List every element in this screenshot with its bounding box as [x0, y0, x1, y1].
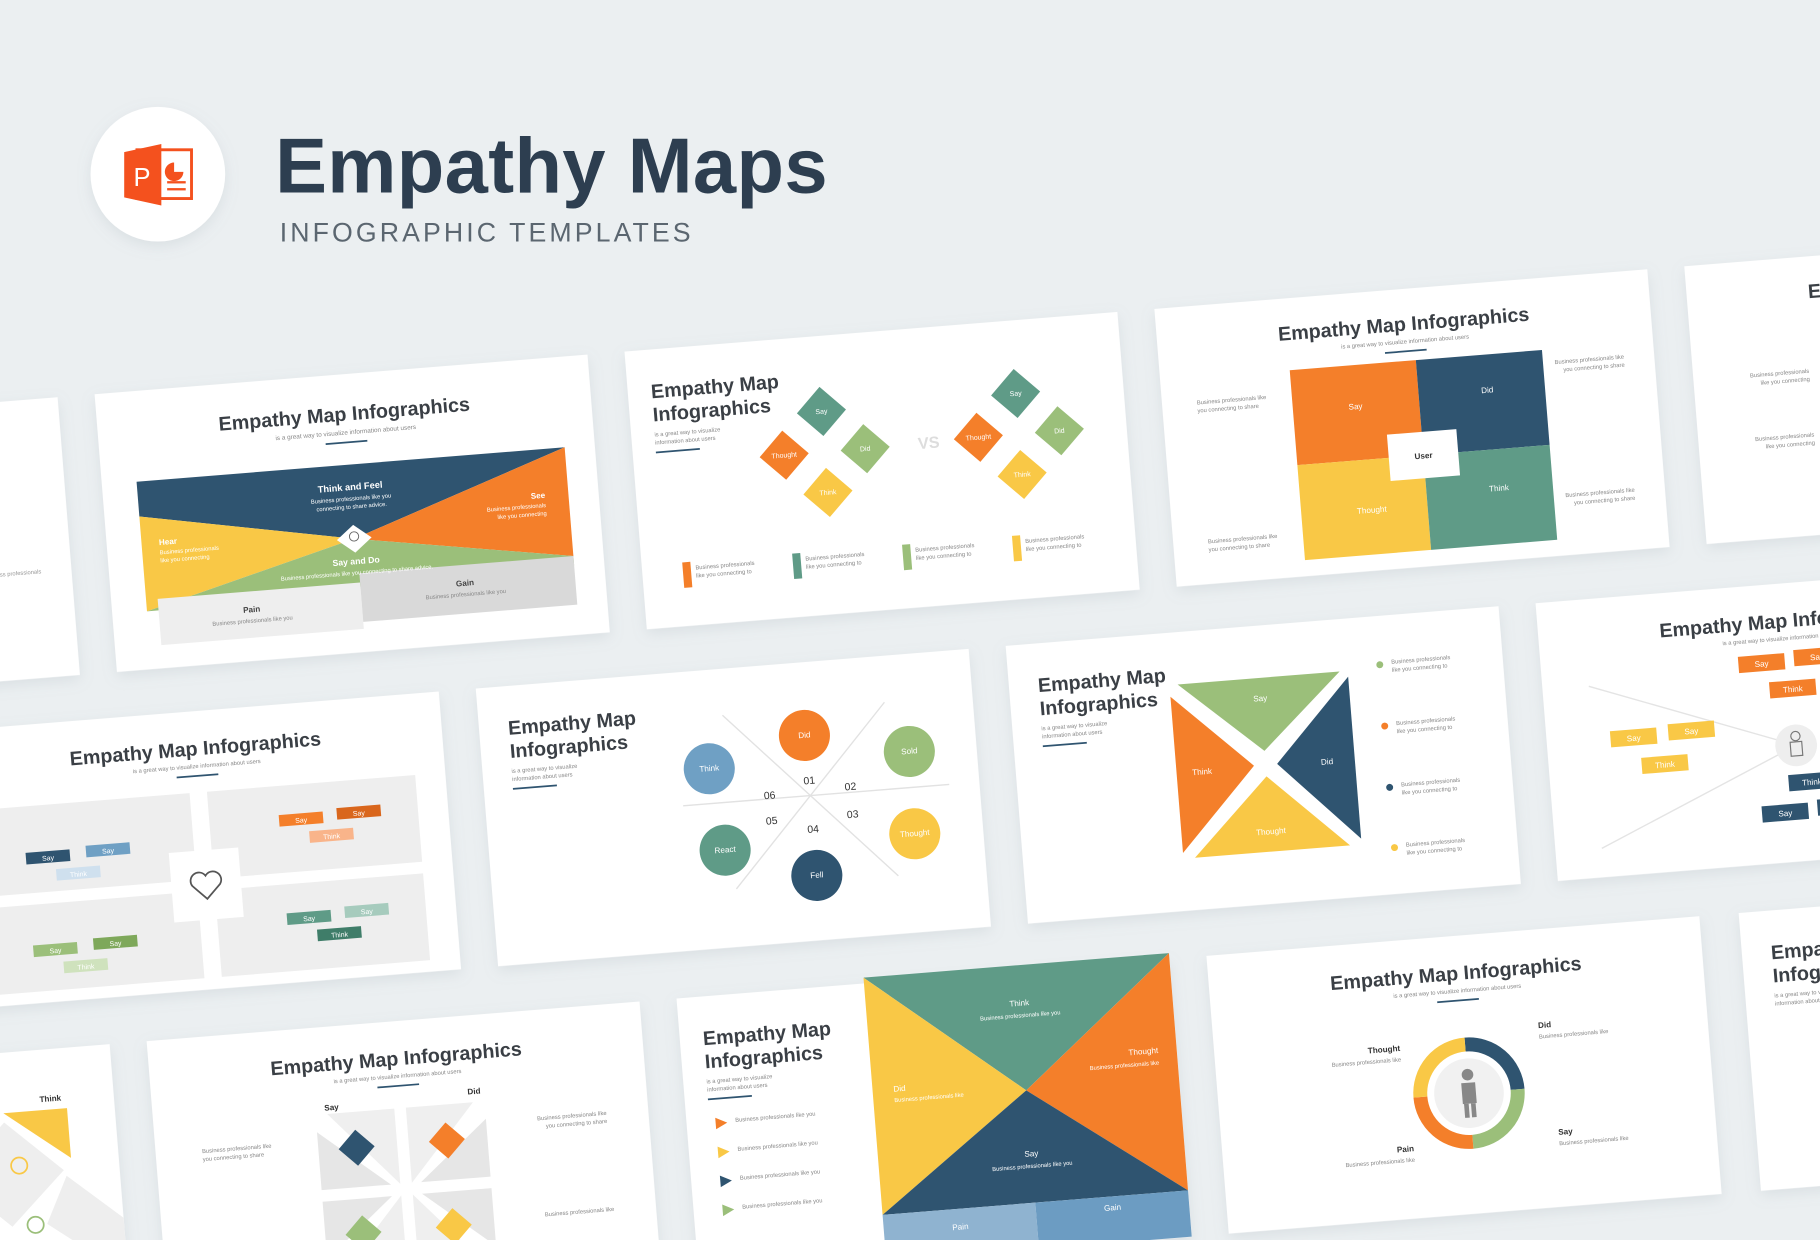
card: X triangles: Think: [1192, 767, 1213, 777]
card: circles: Empathy Map: [507, 708, 637, 740]
card: quadrant user: Business professionals like: [1554, 355, 1624, 366]
card: circles: Sold: [901, 746, 918, 756]
card: diamonds x: you connecting to share: [203, 1152, 264, 1163]
card: big square: Say: [1024, 1149, 1040, 1159]
card: hear/see/think diagram: Gain: [456, 578, 474, 588]
card: diamonds x: Empathy Map Infographics: [270, 1038, 523, 1080]
card: diamonds vs: Empathy Map: [650, 371, 780, 403]
logo: powerpoint: [91, 107, 225, 241]
card: diamonds vs: Thought: [965, 434, 992, 443]
card: ring person: Did: [1538, 1020, 1552, 1030]
card: tags person: Say: [1754, 659, 1770, 669]
card: tags heart: Say: [49, 947, 62, 955]
card: ring person: Empathy Map Infographics: [1329, 953, 1582, 995]
card: tags person: [1536, 564, 1820, 881]
card: big square: Did: [893, 1084, 906, 1094]
card: diamonds vs: like you connecting to: [916, 551, 972, 562]
card: hear/see/think diagram: Business professionals: [487, 503, 546, 514]
card: row1 partial right: like you connecting: [1760, 377, 1810, 387]
card: X triangles: Business professionals: [1396, 716, 1456, 727]
card: quadrant user: you connecting to share: [1209, 543, 1270, 554]
card: circles: Think: [699, 763, 720, 774]
card: tags person: Say: [1684, 726, 1700, 737]
card: big square: Business professionals like you: [740, 1169, 820, 1182]
card: hear/see/think diagram: Business professionals like you: [212, 615, 293, 628]
card: big square: Pain: [952, 1222, 969, 1232]
card: tags heart: is a great way to visualize information about users: [133, 759, 261, 775]
card: tags heart: Think: [331, 931, 349, 940]
card: quadrant user: you connecting to share: [1574, 496, 1636, 507]
card: row3 partial right: [1739, 873, 1820, 1191]
card: tags heart: Think: [323, 833, 341, 841]
card: diamonds vs: Business professionals: [915, 543, 975, 554]
card: X triangles: Did: [1321, 757, 1333, 767]
card: tags heart: Say: [42, 855, 55, 863]
card: X triangles: Business professionals: [1406, 838, 1465, 849]
card: big square: Empathy Map: [702, 1018, 832, 1050]
card: X triangles: Thought: [1256, 826, 1287, 837]
card: diamonds vs: Did: [1054, 428, 1065, 435]
card: quadrant user: you connecting to share: [1197, 404, 1259, 415]
card: quadrant user: Did: [1481, 385, 1494, 395]
logo: powerpoint: P: [133, 164, 151, 192]
card: hear/see/think diagram: Think and Feel: [317, 480, 383, 495]
card: circles: 01: [803, 776, 816, 787]
card: tags heart: Think: [70, 871, 88, 879]
card: diamonds vs: Say: [1009, 390, 1022, 398]
card: diamonds x: is a great way to visualize information about users: [333, 1069, 462, 1085]
card: hear/see/think diagram: Pain: [243, 605, 261, 615]
card: diamonds x: Did: [467, 1087, 481, 1097]
card: tags heart: Empathy Map Infographics: [69, 728, 322, 770]
card: tags heart: [0, 692, 461, 1009]
card: diamonds vs: VS: [917, 433, 940, 453]
card: X triangles: Business professionals: [1391, 655, 1451, 666]
card: ring person: Business professionals like: [1559, 1136, 1629, 1147]
card: quadrant user: Thought: [1357, 505, 1388, 516]
card: quadrant user: Say: [1348, 402, 1364, 412]
card: diamonds x: [147, 1002, 662, 1240]
card: big square: Business professionals like you: [992, 1161, 1073, 1173]
card: hear/see/think diagram: [95, 355, 610, 672]
card: diamonds vs: information about users: [655, 436, 716, 447]
card: tags heart: Say: [303, 915, 316, 923]
card: diamonds vs: Infographics: [652, 395, 772, 426]
card: tags heart: Say: [109, 940, 122, 948]
card: diamonds vs: Thought: [771, 452, 797, 461]
card: diamonds vs: like you connecting to: [696, 569, 752, 580]
card: big square: Business professionals like you: [737, 1140, 818, 1153]
card: hear/see/think diagram: Business professionals like you connecting to share advice.: [281, 564, 434, 583]
card: big square: is a great way to visualize: [706, 1074, 773, 1085]
card: hear/see/think diagram: Business professionals like you: [311, 493, 391, 506]
card: quadrant user: Business professionals like: [1565, 488, 1635, 499]
card: quadrant user: Business professionals like: [1208, 534, 1278, 545]
card: X triangles: Empathy Map: [1037, 665, 1167, 697]
card: hear/see/think diagram: Empathy Map Infographics: [218, 394, 471, 436]
card: diamonds vs: Say: [815, 408, 828, 416]
card: X triangles: like you connecting to: [1406, 846, 1462, 857]
card: hear/see/think diagram: See: [530, 491, 546, 501]
card: hear/see/think diagram: Business professionals: [160, 546, 219, 556]
card: row1 partial right: like you connecting: [1766, 440, 1815, 450]
card: tags heart: Say: [295, 817, 308, 825]
card: quadrant user: [1154, 269, 1670, 587]
card: quadrant user: Empathy Map Infographics: [1277, 304, 1530, 346]
card: circles: 06: [763, 790, 776, 802]
card: diamonds vs: like you connecting to: [1026, 543, 1082, 553]
card: row1 partial left: [0, 397, 80, 715]
card: X triangles: Business professionals: [1401, 778, 1461, 788]
card: hear/see/think diagram: like you connecting: [497, 511, 547, 521]
card: diamonds vs: Did: [860, 446, 871, 453]
card: diamonds x: Business professionals like: [545, 1207, 615, 1218]
card: ring person: Thought: [1368, 1044, 1401, 1056]
card: hear/see/think diagram: is a great way to visualize information about users: [275, 424, 416, 442]
card: quadrant user: Business professionals like: [1197, 395, 1267, 407]
card: big square: Think: [1009, 998, 1030, 1009]
card: circles: Fell: [810, 870, 824, 880]
card: ring person: Business professionals like: [1345, 1158, 1415, 1169]
card: circles: Did: [798, 730, 811, 740]
card: row1 partial right: [1684, 227, 1820, 544]
card: diamonds vs: Think: [819, 489, 837, 497]
card: diamonds vs: Business professionals: [805, 552, 865, 563]
card: tags person: Say: [1626, 733, 1642, 743]
card: circles: React: [714, 845, 737, 855]
card: hear/see/think diagram: Business professionals like you: [426, 589, 506, 601]
card: circles: 04: [807, 824, 820, 836]
card: quadrant user: Think: [1489, 483, 1510, 494]
card: big square: Gain: [1104, 1203, 1121, 1213]
card: X triangles: is a great way to visualize: [1041, 721, 1108, 732]
card: tags person: Say: [1778, 808, 1794, 819]
card: ring person: Pain: [1397, 1144, 1414, 1155]
card: big square: Business professionals like you: [980, 1010, 1061, 1023]
card: circles: 03: [847, 809, 859, 821]
card: big square: Thought: [1128, 1046, 1159, 1057]
card: row3 partial left: [0, 1044, 132, 1240]
subtitle: INFOGRAPHIC TEMPLATES: [280, 217, 691, 247]
card: diamonds vs: [624, 312, 1140, 629]
card: big square: Infographics: [704, 1042, 824, 1073]
card: quadrant user: User: [1414, 451, 1434, 461]
card: big square: Business professionals like you: [742, 1198, 823, 1211]
card: ring person: Say: [1558, 1127, 1574, 1137]
card: circles: Thought: [900, 828, 931, 839]
card: quadrant user: is a great way to visualize information about users: [1341, 334, 1469, 351]
card: diamonds x: you connecting to share: [546, 1119, 608, 1130]
card: tags heart: Say: [102, 848, 115, 856]
card: circles: Infographics: [509, 732, 629, 763]
card: diamonds x: Business professionals like: [202, 1144, 272, 1155]
card: big square: [676, 953, 1192, 1240]
card: diamonds vs: Business professionals: [1025, 534, 1085, 545]
card: ring person: Business professionals like: [1332, 1057, 1401, 1069]
card: row3 partial left: Think: [39, 1093, 62, 1104]
card: hear/see/think diagram: connecting to share advice.: [316, 502, 388, 513]
card: circles: [476, 649, 991, 966]
card: X triangles: like you connecting to: [1392, 663, 1448, 674]
card: hear/see/think diagram: like you connecting: [160, 555, 210, 564]
card: diamonds vs: like you connecting to: [806, 560, 862, 571]
title: Empathy Maps: [275, 124, 828, 210]
card: diamonds x: Business professionals like: [537, 1111, 607, 1122]
card: big square: Business professionals like: [894, 1093, 964, 1104]
card: tags person: Think: [1783, 684, 1804, 695]
card: ring person: Business professionals like: [1539, 1029, 1609, 1041]
card: big square: Business professionals like: [1090, 1061, 1159, 1072]
card: X triangles: like you connecting to: [1397, 725, 1453, 735]
card: quadrant user: you connecting to share: [1563, 363, 1625, 374]
card: tags person: Think: [1655, 760, 1676, 770]
card: X triangles: Say: [1253, 693, 1269, 704]
card: diamonds vs: Business professionals: [695, 561, 755, 572]
card: ring person: [1206, 916, 1722, 1234]
card: tags heart: Say: [353, 810, 366, 818]
card: X triangles: like you connecting to: [1402, 786, 1458, 797]
card: diamonds vs: is a great way to visualize: [654, 427, 721, 439]
card: circles: 05: [766, 816, 778, 828]
card: row1 partial right: Business professionals: [1755, 432, 1815, 443]
card: X triangles: [1006, 606, 1521, 924]
card: circles: information about users: [512, 772, 573, 783]
card: ring person: is a great way to visualize information about users: [1393, 984, 1522, 1000]
card: circles: 02: [844, 782, 857, 793]
card: X triangles: Infographics: [1039, 689, 1159, 720]
card: row1 partial right: Business professionals: [1750, 369, 1810, 379]
card: big square: information about users: [707, 1083, 768, 1094]
card: tags heart: Say: [361, 908, 374, 916]
card: hear/see/think diagram: Hear: [159, 537, 178, 547]
card: diamonds vs: Think: [1013, 471, 1031, 480]
card: circles: is a great way to visualize: [511, 764, 578, 775]
card: X triangles: information about users: [1042, 730, 1103, 740]
card: tags heart: Think: [77, 963, 95, 972]
card: hear/see/think diagram: Say and Do: [332, 554, 380, 568]
card: diamonds x: Say: [324, 1103, 340, 1113]
card: big square: Business professionals like you: [735, 1111, 816, 1124]
